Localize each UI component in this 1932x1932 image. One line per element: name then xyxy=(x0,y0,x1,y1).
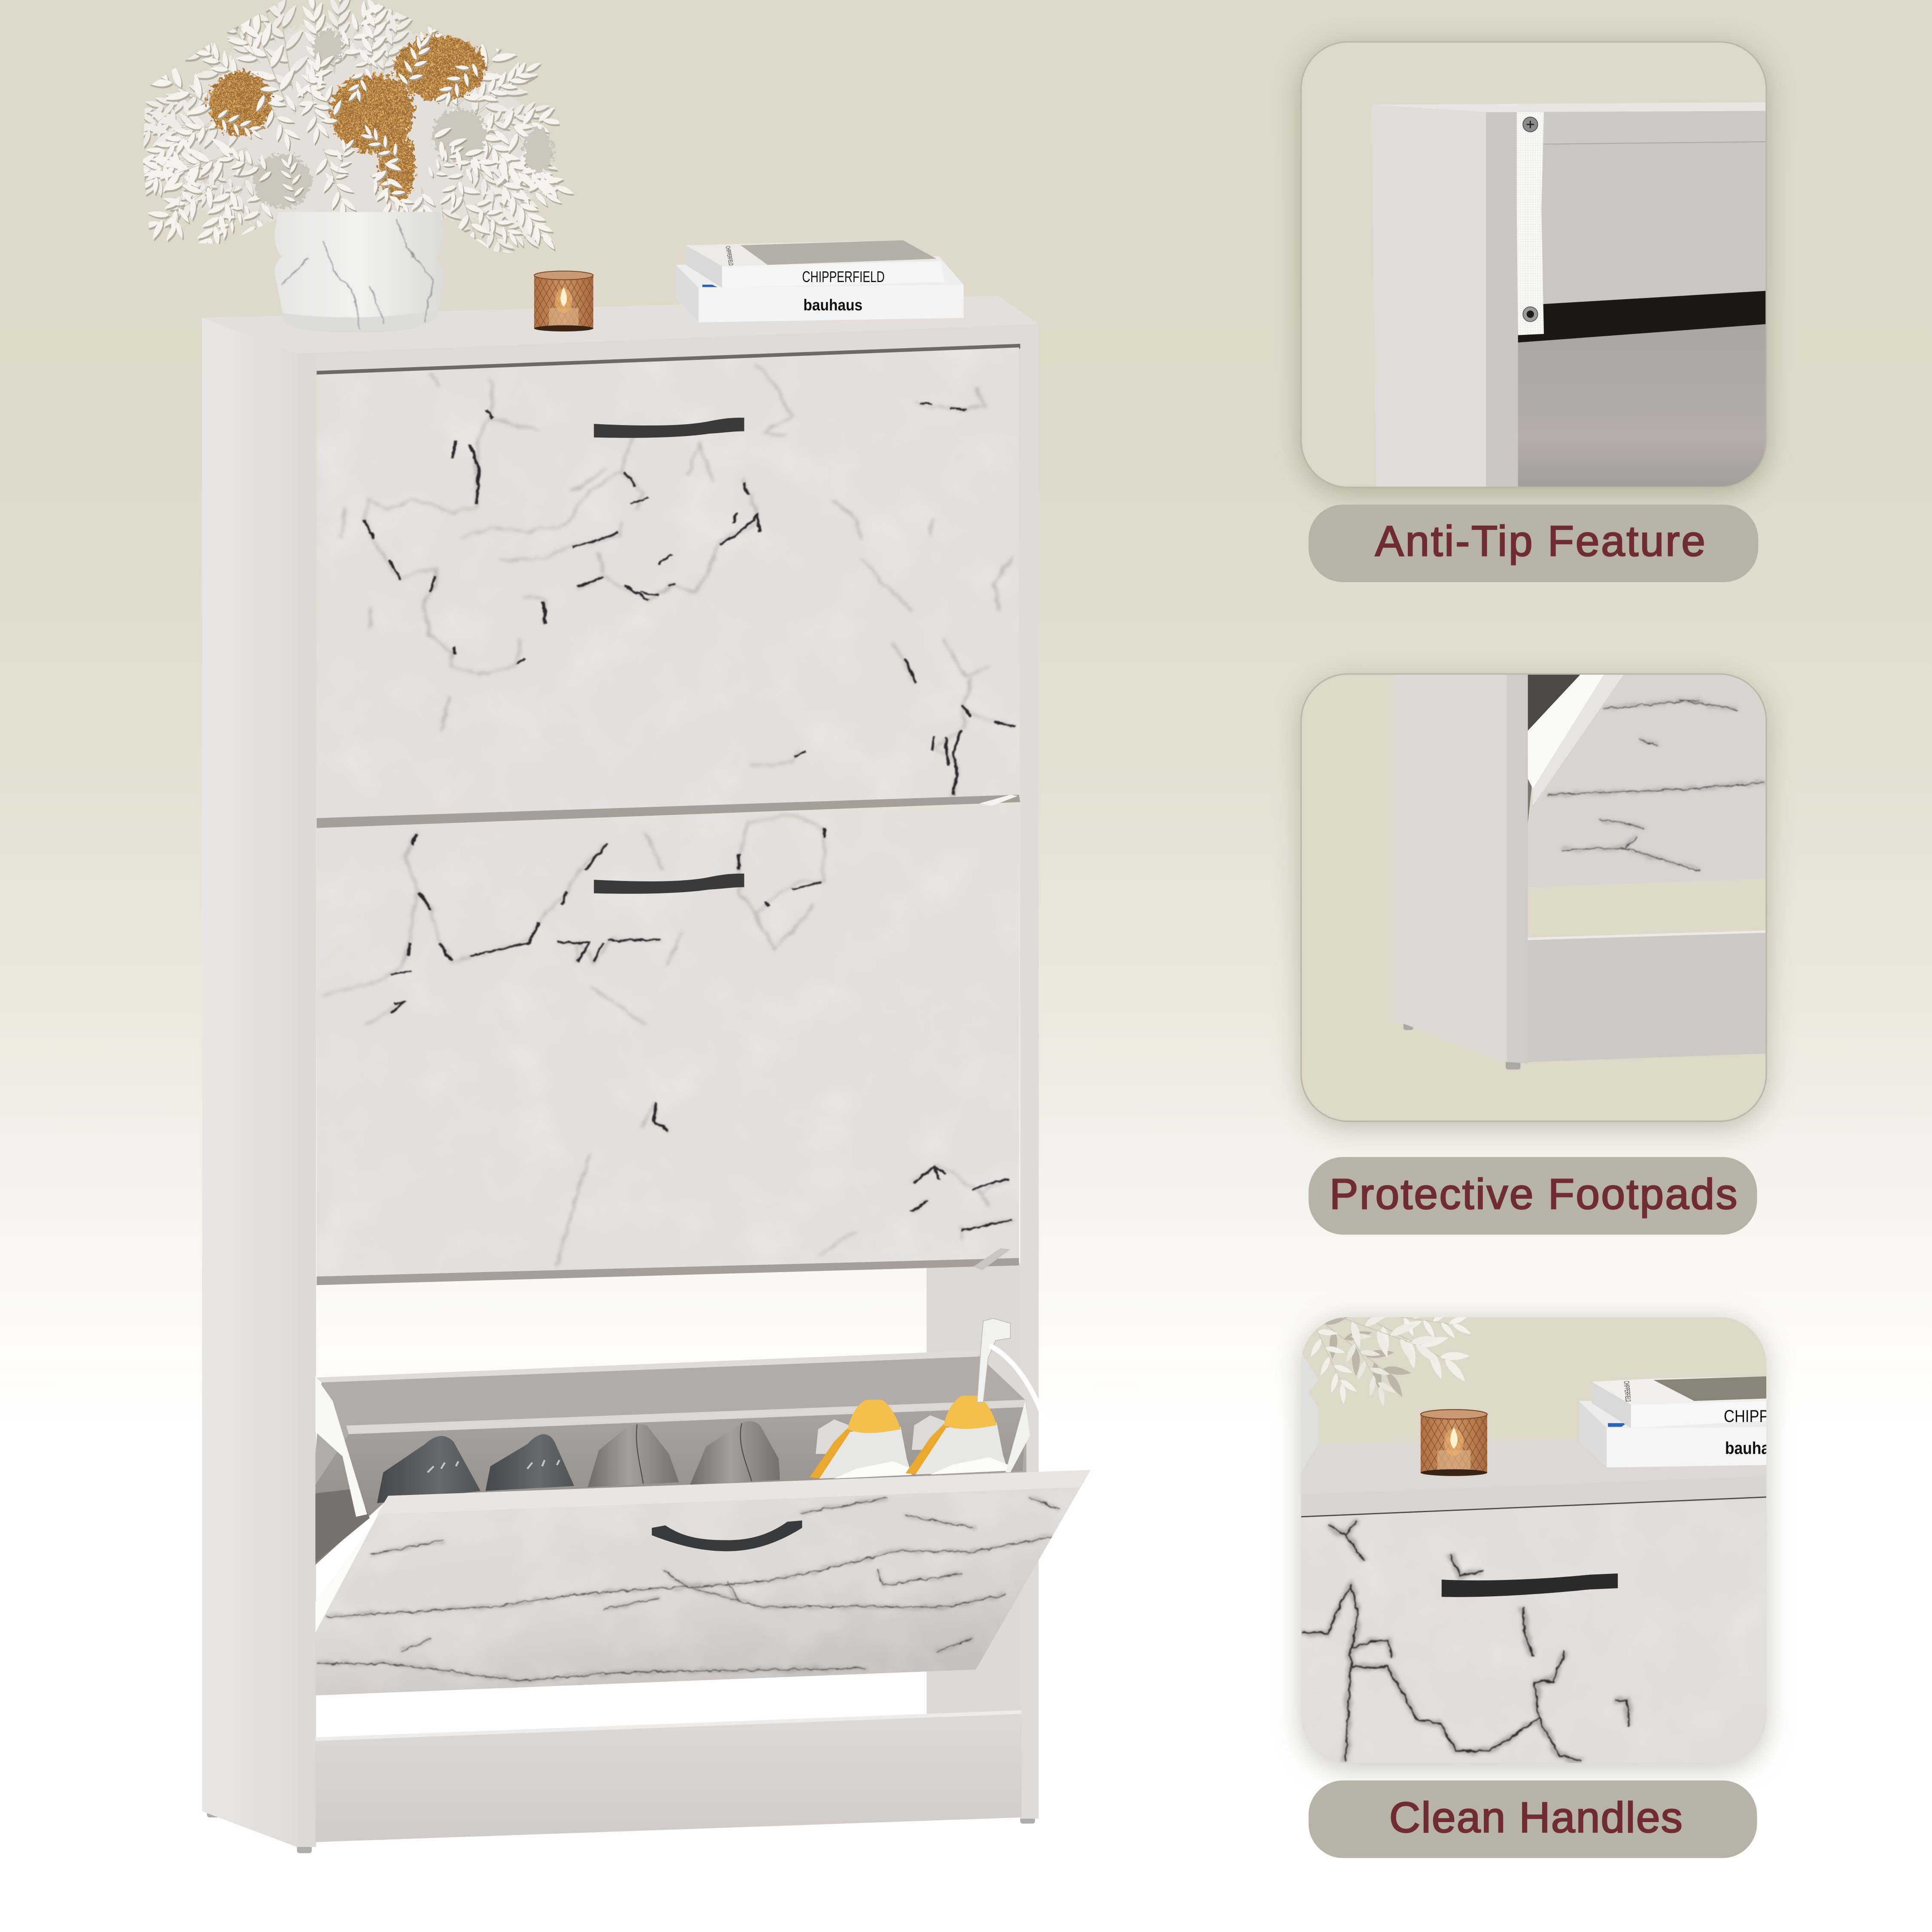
left side panel xyxy=(202,318,297,1847)
bauhaus title: bauhaus xyxy=(803,296,863,314)
leaves xyxy=(1299,1291,1485,1413)
book text chipperfield: CHIPPERFIELD xyxy=(1724,1406,1832,1425)
top screw xyxy=(1523,117,1538,132)
cabinet front rail xyxy=(1301,1476,1767,1516)
marble texture xyxy=(317,805,1019,1276)
grey shoe left xyxy=(588,1424,679,1487)
lower book cover xyxy=(699,285,963,322)
shoe cabinet xyxy=(202,296,1092,1853)
cabinet feet xyxy=(207,1809,1035,1853)
black gap xyxy=(1518,291,1767,343)
top surface xyxy=(202,296,1039,354)
grey plumes xyxy=(252,30,553,208)
drawer 2 handle xyxy=(594,874,744,894)
rear leaf shadows xyxy=(101,0,607,321)
panel image xyxy=(1301,674,1767,1122)
bottom grommet xyxy=(1523,307,1538,322)
panel shadow xyxy=(1301,680,1766,1127)
sneaker right xyxy=(905,1396,1008,1474)
marble vase xyxy=(275,212,445,333)
dark shoe left xyxy=(377,1436,480,1503)
drawer top edge xyxy=(316,1350,978,1382)
orange seed clusters xyxy=(208,36,486,204)
front stile xyxy=(1486,112,1518,488)
bottom plinth xyxy=(316,1711,1021,1842)
drawer lower interior xyxy=(316,1407,1027,1565)
white leaves xyxy=(128,0,580,273)
hinge 2 xyxy=(973,1248,1010,1270)
label text: Protective Footpads xyxy=(1330,1170,1738,1218)
lower book pages xyxy=(676,265,699,322)
right arm arc xyxy=(990,1346,1055,1470)
rail shadow line xyxy=(1543,142,1767,144)
panel: anti-tip feature xyxy=(1301,42,1767,493)
drawer interior back xyxy=(316,1355,1027,1565)
shoes xyxy=(377,1396,1008,1503)
gap below door 2 xyxy=(317,1258,1019,1285)
upper book cover xyxy=(722,261,945,288)
panel shadow xyxy=(1301,47,1766,493)
drawer 1 marble door xyxy=(317,347,1019,818)
panel image xyxy=(1299,1291,1832,1765)
book stack xyxy=(676,240,963,322)
book stack: CHIPPERFIELD xyxy=(724,246,734,266)
blue tab xyxy=(1608,1423,1626,1427)
vase fragment xyxy=(1301,1352,1318,1473)
handle xyxy=(1442,1574,1618,1597)
lower book top xyxy=(676,256,963,288)
hinge 1 xyxy=(980,795,1018,806)
marble texture xyxy=(317,347,1019,818)
door top edge xyxy=(377,1470,1091,1514)
bouquet base mass xyxy=(166,23,548,224)
panel shadow xyxy=(1301,1321,1766,1769)
left front stile xyxy=(297,354,316,1847)
dark shoe right xyxy=(486,1434,574,1491)
lower book top xyxy=(1579,1401,1767,1428)
upper book cover image xyxy=(741,240,936,265)
door dark line xyxy=(1301,1497,1767,1517)
book text bauhaus: bauhaus xyxy=(1725,1439,1787,1458)
upper book cover xyxy=(1631,1401,1767,1428)
inner shelf strip xyxy=(346,1400,1027,1434)
door 1 shadow gap xyxy=(317,344,1020,376)
panel image: CHIPPERFIELD xyxy=(1622,1381,1633,1402)
label text: Anti-Tip Feature xyxy=(1375,517,1705,565)
upper book pages xyxy=(1592,1382,1631,1428)
plinth xyxy=(1528,932,1767,1062)
plinth top edge highlight xyxy=(316,1710,1021,1741)
sneaker left xyxy=(810,1400,912,1479)
panel: protective footpads xyxy=(1301,674,1767,1127)
small interior grey xyxy=(1528,754,1535,823)
dark left interior xyxy=(316,1488,370,1562)
arm marble edge xyxy=(1533,674,1624,806)
right front stile xyxy=(1020,325,1039,1819)
right arm brace xyxy=(1005,1401,1030,1473)
drawer 1 handle xyxy=(594,418,744,438)
marble texture xyxy=(316,1470,1092,1695)
interior side wall xyxy=(927,1263,1023,1714)
marble veins xyxy=(1548,700,1766,871)
lower book pages xyxy=(1579,1401,1607,1467)
label: protective footpads xyxy=(1309,1157,1757,1235)
candle xyxy=(1421,1410,1487,1476)
upper book top xyxy=(686,240,940,266)
label: clean handles xyxy=(1309,1780,1757,1858)
bouquet xyxy=(100,0,607,321)
right bracket mount xyxy=(977,1318,1010,1402)
panel outline xyxy=(1301,42,1766,487)
door left white edge xyxy=(316,1496,389,1635)
label: anti-tip feature xyxy=(1309,504,1758,582)
open door marble face xyxy=(316,1470,1091,1695)
open drawer xyxy=(316,1318,1092,1695)
lower book cover xyxy=(1607,1427,1767,1467)
vase veins xyxy=(281,219,434,330)
back panel xyxy=(1518,142,1767,306)
label text: Clean Handles xyxy=(1389,1794,1683,1842)
left white arm bracket xyxy=(316,1376,367,1517)
book cover image xyxy=(1653,1376,1767,1401)
door marble xyxy=(1301,1498,1767,1765)
leaf shadows xyxy=(129,0,581,275)
interior dark xyxy=(1528,674,1581,731)
plinth top edge xyxy=(1528,930,1767,940)
white arm xyxy=(1528,674,1604,789)
drawer 2 marble door xyxy=(317,805,1019,1276)
panel image xyxy=(1301,42,1767,488)
lower book blue tab xyxy=(702,285,717,287)
open drawer handle xyxy=(652,1520,802,1551)
door marble xyxy=(1528,674,1767,887)
anti-tip strap xyxy=(1517,112,1544,335)
vase band shading xyxy=(282,310,437,333)
gap below door 1 xyxy=(317,795,1020,828)
panel outline xyxy=(1301,674,1766,1121)
marble veins xyxy=(1301,1500,1767,1763)
shoe seams xyxy=(636,1423,752,1483)
cabinet top surface xyxy=(1301,1434,1767,1495)
upper book pages xyxy=(686,245,722,288)
front stile xyxy=(1507,674,1528,1063)
glass candle xyxy=(534,271,593,331)
upper book top xyxy=(1592,1376,1767,1405)
inner white leaves xyxy=(211,29,507,233)
top front rail xyxy=(297,324,1039,374)
top edge xyxy=(1371,102,1767,112)
rear white leaves xyxy=(100,0,606,319)
highlights on dark shoes xyxy=(428,1460,559,1473)
cabinet side xyxy=(1371,105,1487,488)
chipperfield title: CHIPPERFIELD xyxy=(802,268,885,286)
panel: clean handles xyxy=(1299,1291,1832,1769)
footpads xyxy=(1403,1023,1520,1069)
inner leaf shadows xyxy=(212,30,507,234)
grey shoe right xyxy=(690,1421,780,1485)
cabinet side xyxy=(1394,674,1507,1062)
lower interior xyxy=(1518,324,1767,488)
top rail xyxy=(1518,111,1767,146)
